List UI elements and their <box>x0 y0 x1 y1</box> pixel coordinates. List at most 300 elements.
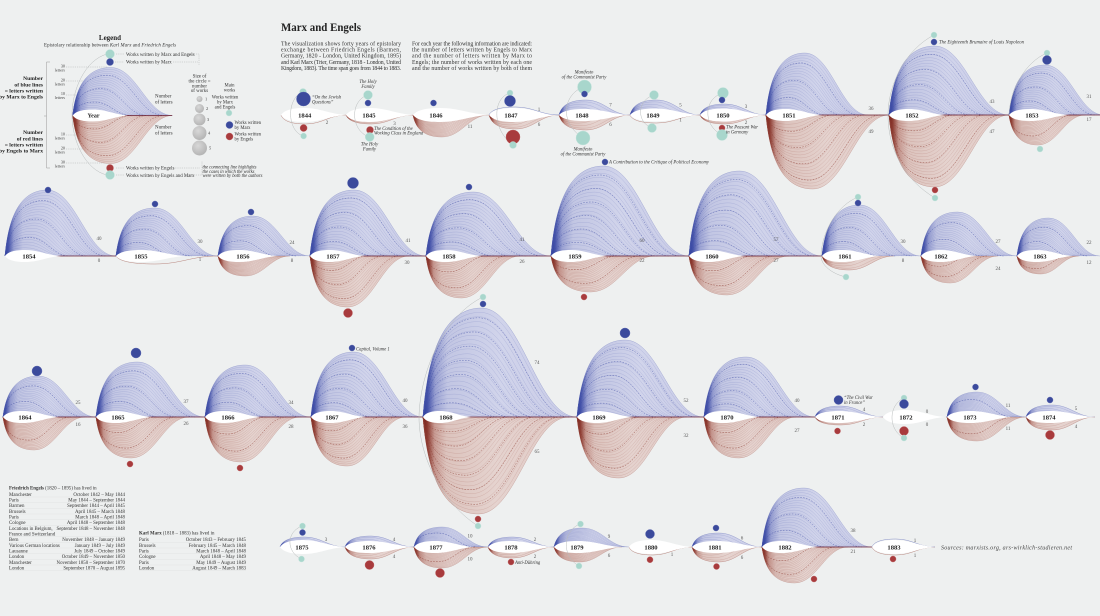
year 1850 <box>700 88 766 140</box>
legend text: blue lines: of blue lines <box>14 82 44 88</box>
year 1858: 26 <box>520 260 525 265</box>
main works key <box>212 84 262 142</box>
legend text: blue lines <box>0 76 44 100</box>
year 1855: 1855 <box>134 253 148 260</box>
year 1862: 27 <box>996 240 1001 245</box>
year 1846: 1846 <box>429 112 443 119</box>
main works key: by Marx <box>217 100 234 106</box>
year 1883: 1 <box>914 539 917 544</box>
year 1880: 1880 <box>644 544 658 551</box>
legend number-of-letters labels: of letters <box>155 132 173 136</box>
year 1848: 6 <box>609 123 612 128</box>
year 1869: 32 <box>684 434 689 439</box>
year 1872: 0 <box>926 423 929 428</box>
year 1858: 41 <box>520 238 525 243</box>
year 1867: 40 <box>402 399 408 404</box>
table: places Engels lived: September 1844 – April 1845 <box>67 504 126 509</box>
intro text: second column: and the number of letters written by Marx to <box>412 53 532 60</box>
year 1877 <box>414 527 488 578</box>
year 1879: 1879 <box>570 544 584 551</box>
year 1845: The Holy <box>359 80 378 85</box>
year 1883 <box>872 539 935 562</box>
legend text: red lines: = letters written <box>5 142 44 148</box>
legend heading: Legend <box>99 34 121 42</box>
table: places Marx lived: Paris <box>139 538 149 543</box>
legend leader lines <box>66 54 202 175</box>
size scale circles <box>192 96 207 156</box>
year 1845: The Condition of the <box>374 127 413 132</box>
legend text: red lines: Number <box>23 130 44 136</box>
legend text: blue lines: by Marx to Engels <box>0 94 44 100</box>
year 1880: 1 <box>671 553 674 558</box>
year 1877: 10 <box>468 534 473 540</box>
legend text: red lines: by Engels to Marx <box>0 148 43 154</box>
legend connecting arc <box>72 54 107 175</box>
year 1868 <box>419 294 577 529</box>
year 1845: 3 <box>393 122 396 127</box>
table: places Engels lived: May 1844 – September 1844 <box>68 498 126 504</box>
year 1857 <box>310 178 426 318</box>
table: places Engels lived: April 1845 – March 1848 <box>75 510 126 515</box>
year 1848: Manifesto <box>574 70 594 76</box>
main works key: by Engels <box>234 138 253 142</box>
table: places Marx lived: Brussels <box>139 544 156 549</box>
table: places Engels lived: September 1870 – August 1895 <box>63 566 126 572</box>
year 1867 <box>311 345 423 466</box>
year 1851: 49 <box>868 130 874 135</box>
year 1860 <box>689 171 822 295</box>
legend work circles <box>106 50 114 180</box>
year 1850: The Peasant War <box>726 126 758 130</box>
intro text: first column: and Karl Marx (Trier, Germany, 1818 - London, United <box>281 59 401 66</box>
size scale numbers: 3 <box>207 117 210 122</box>
sources: Sources: marxists.org, ars-wirklich-studieren.net <box>941 546 1072 552</box>
legend scale labels: 20 <box>61 78 65 82</box>
year 1866: 34 <box>288 401 294 406</box>
year 1865 <box>96 348 205 467</box>
year 1847: 1 <box>538 108 541 113</box>
year 1863: 22 <box>1086 241 1092 246</box>
year 1845: 1845 <box>362 112 376 119</box>
table: places Engels lived: Cologne <box>9 521 26 526</box>
table: places Engels lived: Paris <box>9 516 19 520</box>
year 1859: 1859 <box>568 253 582 260</box>
legend work labels: Works written by Engels and Marx <box>126 174 195 179</box>
table: places Engels lived: November 1848 – January 1849 <box>62 538 126 543</box>
table: places Engels lived: Brussels <box>9 510 26 515</box>
legend scale labels: letters <box>55 95 65 100</box>
year 1874: 5 <box>1075 407 1078 412</box>
year 1852: 43 <box>990 100 995 105</box>
year 1855 <box>116 201 218 264</box>
year 1849: 1849 <box>646 112 660 119</box>
table: places Marx lived: March 1848 – April 1848 <box>196 550 247 554</box>
year 1851 <box>766 53 889 189</box>
year 1881: 1881 <box>708 544 722 551</box>
year 1860: 27 <box>774 259 779 264</box>
year 1858 <box>426 184 551 298</box>
connecting line note: the cases in which the works <box>202 170 255 175</box>
table: places Engels lived: April 1848 – September 1848 <box>67 521 126 526</box>
year 1853: 17 <box>1086 118 1092 123</box>
year 1851: 36 <box>868 107 874 112</box>
legend scale labels: 20 <box>61 146 65 150</box>
year 1845 <box>346 80 424 152</box>
year 1871: 4 <box>863 408 866 413</box>
year 1852 <box>888 32 1025 201</box>
size scale numbers: 5 <box>209 146 212 150</box>
legend work labels <box>126 53 195 179</box>
table: places Marx lived: May 1849 – August 1849 <box>196 561 247 566</box>
year 1880 <box>629 530 692 563</box>
year 1848: 7 <box>609 104 612 108</box>
year 1876 <box>345 536 414 570</box>
legend scale labels: 10 <box>61 132 65 136</box>
year 1866: 28 <box>288 425 294 430</box>
legend example curves: Year <box>88 114 100 120</box>
year 1856: 8 <box>291 259 294 264</box>
size scale heading: the circle = <box>188 80 211 84</box>
year 1855: 30 <box>198 240 203 245</box>
year 1881: 6 <box>741 556 744 561</box>
year 1881: 6 <box>741 536 744 542</box>
year 1868: 65 <box>534 450 540 455</box>
table: places Engels lived <box>9 486 126 572</box>
table: places Marx lived: April 1848 – May 1849 <box>200 555 247 560</box>
year 1879: 6 <box>608 554 611 559</box>
main works key: Works written <box>234 121 262 126</box>
year 1872 <box>883 395 945 441</box>
legend scale labels <box>55 64 65 168</box>
year 1863: 12 <box>1086 261 1092 266</box>
size scale heading <box>188 74 211 94</box>
main works key: and Engels <box>215 106 236 110</box>
year 1864 <box>3 366 96 450</box>
legend number-of-letters labels <box>155 94 173 136</box>
intro text: second column: the number of letters written by Engels to Marx <box>412 47 532 54</box>
year 1854: 0 <box>98 259 101 264</box>
table: places Marx lived: Paris <box>139 550 149 554</box>
year 1870: 27 <box>794 429 800 434</box>
panel: legend <box>0 34 263 180</box>
year 1856: 1856 <box>236 253 250 260</box>
connecting line note: the connecting line highlights <box>202 166 257 170</box>
legend scale labels: letters <box>55 68 65 72</box>
year 1874: 1874 <box>1042 414 1056 421</box>
connecting line note <box>202 166 263 179</box>
year 1853 <box>1009 50 1100 152</box>
table: places Engels lived: October 1849 – November 1850 <box>62 555 126 560</box>
year 1864: 16 <box>76 423 81 428</box>
year 1853: 31 <box>1086 95 1092 100</box>
year 1874: 4 <box>1075 425 1078 430</box>
connecting line note: were written by both the authors <box>202 174 263 179</box>
year 1869 <box>577 328 704 478</box>
year 1873: 11 <box>1006 404 1011 409</box>
table: places Engels lived: March 1848 – April 1848 <box>75 516 126 520</box>
year 1883: 1 <box>914 554 917 559</box>
main works key: Works written <box>234 132 262 138</box>
year 1857: 30 <box>404 261 410 266</box>
year 1858: 1858 <box>442 253 456 260</box>
year 1873: 1873 <box>963 414 977 421</box>
intro text: first column: Germany, 1820 - London, United Kingdom, 1895) <box>281 53 401 60</box>
year 1863: 1863 <box>1033 253 1047 260</box>
year 1850: 2 <box>745 121 748 126</box>
year 1874 <box>1026 397 1095 440</box>
year 1848: of the Communist Party <box>561 152 606 158</box>
year 1850: 3 <box>745 105 748 110</box>
legend scale labels: letters <box>55 164 65 168</box>
year 1845: Family <box>360 85 376 90</box>
intro text: second column: For each year the following information are indicated: <box>412 40 532 48</box>
table: places Engels lived: Lausanne <box>9 550 28 554</box>
year 1852: The Eighteenth Brumaire of Louis Napoleon <box>939 40 1025 46</box>
year 1860: 1860 <box>705 253 719 260</box>
intro text: first column: Kingdom, 1883). The time span goes from 1844 to 1883. <box>281 65 402 72</box>
year 1864: 25 <box>76 401 81 406</box>
year 1864: 1864 <box>18 414 32 421</box>
size scale heading: Size of <box>193 74 207 80</box>
intro text: second column: Engels; the number of works written by each one <box>412 59 532 66</box>
main works key: works <box>224 88 235 94</box>
year 1879 <box>554 521 629 569</box>
size scale numbers: 1 <box>205 96 207 102</box>
table: places Engels lived: Locations in Belgium, <box>9 527 53 532</box>
legend scale labels: 30 <box>61 64 65 68</box>
year 1870: 40 <box>794 399 800 404</box>
legend work labels: Works written by Marx <box>126 60 172 66</box>
intro text: second column: and the number of works written by both of them <box>412 65 532 72</box>
title: Marx and Engels <box>281 20 361 34</box>
table: places Marx lived <box>139 532 247 572</box>
size scale heading: of works <box>191 89 208 94</box>
main works key: by Marx <box>234 126 251 131</box>
year 1869: 1869 <box>592 414 606 421</box>
size scale heading: number <box>192 84 207 90</box>
table: places Engels lived: September 1848 – November 1848 <box>57 527 126 532</box>
year 1871: in France” <box>844 401 865 406</box>
year 1871: 2 <box>863 423 866 428</box>
year 1854: 1854 <box>22 253 36 260</box>
table: places Engels lived: Bern <box>9 538 19 543</box>
table: places Engels lived: July 1849 – October 1849 <box>74 550 126 554</box>
year 1860: 57 <box>774 238 779 243</box>
table: places Marx lived: Karl Marx (1818 – 1883) has lived in <box>139 532 215 536</box>
year 1872: 1872 <box>899 414 913 421</box>
legend scale labels: 30 <box>61 160 65 164</box>
year 1876: 4 <box>393 555 396 560</box>
year 1870 <box>704 357 815 458</box>
year 1881 <box>692 525 762 570</box>
year 1875: 3 <box>325 538 328 543</box>
year 1878: Anti-Dühring <box>514 561 541 566</box>
year 1877: 1877 <box>429 544 443 551</box>
year 1845: Family <box>362 148 377 152</box>
year 1849: 1 <box>679 118 682 124</box>
size scale numbers <box>205 96 212 150</box>
year 1865: 37 <box>184 400 189 405</box>
legend subtitle: Epistolary relationship between Karl Marx and Friedrich Engels <box>44 44 176 48</box>
table: places Engels lived: Various German locations <box>9 544 60 549</box>
intro text: first column <box>281 40 402 72</box>
year 1868: 74 <box>534 361 540 366</box>
legend text: blue lines: Number <box>23 76 44 82</box>
year 1866 <box>205 365 311 471</box>
year 1876: 1876 <box>362 544 376 551</box>
year 1847: 1847 <box>504 112 518 119</box>
year 1882 <box>762 488 872 583</box>
year 1849: 5 <box>679 104 682 108</box>
legend example curves <box>73 68 173 164</box>
legend scale labels: 10 <box>61 91 65 96</box>
year 1867: 1867 <box>325 414 339 421</box>
table: places Engels lived: Friedrich Engels (1820 – 1895) has lived in <box>9 486 97 492</box>
table: places Engels lived: January 1849 – July 1849 <box>75 544 126 549</box>
legend work labels: Works written by Engels <box>126 166 174 172</box>
year 1844 <box>281 88 346 139</box>
year 1859 <box>551 159 710 300</box>
year 1850: 1850 <box>716 112 730 119</box>
table: places Marx lived: Cologne <box>139 555 156 560</box>
legend text: red lines <box>0 130 44 154</box>
year 1878 <box>488 537 554 566</box>
year 1878: 2 <box>534 538 537 543</box>
legend text: red lines: of red lines <box>17 136 44 142</box>
legend scale labels: letters <box>55 82 65 86</box>
intro text: second column <box>412 40 532 72</box>
main works key: Main <box>225 84 235 88</box>
year 1871: “The Civil War <box>844 395 873 401</box>
year 1844: 1844 <box>298 112 312 119</box>
table: places Engels lived: November 1850 – September 1870 <box>57 561 126 566</box>
year 1871: 1871 <box>831 414 845 421</box>
table: places Engels lived: Paris <box>9 498 19 504</box>
table: places Marx lived: February 1845 – March 1848 <box>189 544 247 549</box>
legend scale labels: letters <box>55 150 65 154</box>
legend number-of-letters labels: of letters <box>155 100 173 106</box>
year 1844: “On the Jewish <box>312 94 342 100</box>
year 1865: 1865 <box>111 414 125 421</box>
year 1871 <box>815 395 883 434</box>
year 1852: 47 <box>990 130 995 135</box>
year 1851: 1851 <box>782 112 796 119</box>
year 1846 <box>413 100 489 137</box>
year 1865: 26 <box>184 422 189 427</box>
year 1861: 8 <box>902 259 905 264</box>
year 1856 <box>218 209 310 276</box>
year 1859: A Contribution to the Critique of Political Economy <box>608 160 710 166</box>
year 1850: in Germany <box>726 130 749 136</box>
year 1853: 1853 <box>1025 112 1039 119</box>
table: places Engels lived: Barmen <box>9 504 25 509</box>
table: places Engels lived: October 1842 – May 1844 <box>73 493 126 498</box>
table: places Engels lived: London <box>9 555 25 560</box>
year 1861: 30 <box>900 240 906 245</box>
year 1872: 0 <box>926 410 929 415</box>
intro text: first column: exchange between Friedrich Engels (Barmen, <box>281 47 402 54</box>
year 1870: 1870 <box>720 414 734 421</box>
year 1866: 1866 <box>221 414 235 421</box>
year 1875 <box>280 523 345 562</box>
year 1882: 1882 <box>778 544 792 551</box>
year 1879: 9 <box>608 535 611 540</box>
year 1844: 2 <box>326 121 329 126</box>
table: places Marx lived: August 1849 – March 1883 <box>192 566 247 572</box>
year 1848: 1848 <box>575 112 589 119</box>
year 1882: 38 <box>850 529 856 534</box>
year 1854 <box>5 187 116 264</box>
table: places Engels lived: Manchester <box>9 561 32 566</box>
year 1861 <box>821 194 921 280</box>
year 1852: 1852 <box>905 112 919 119</box>
table: places Engels lived: Manchester <box>9 493 32 498</box>
year 1857: 41 <box>406 239 411 244</box>
table: places Engels lived: France and Switzerland <box>9 532 56 538</box>
legend number-of-letters labels: Number <box>155 94 172 100</box>
year 1875: 1875 <box>295 544 309 551</box>
legend bracket <box>44 62 50 168</box>
year 1849 <box>630 90 700 132</box>
table: places Marx lived: London <box>139 566 155 572</box>
table: places Engels lived: London <box>9 566 25 572</box>
year 1847: 6 <box>538 123 541 128</box>
year 1848 <box>559 70 630 158</box>
year 1844: Questions” <box>312 100 334 106</box>
year 1867: Capital, Volume 1 <box>356 348 390 352</box>
table: places Marx lived: Paris <box>139 561 149 566</box>
year 1847 <box>489 90 559 148</box>
year 1848: of the Communist Party <box>562 76 607 80</box>
legend scale labels: letters <box>55 136 65 140</box>
year 1862: 1862 <box>934 253 948 260</box>
year 1845: The Holy <box>361 142 379 148</box>
year 1882: 21 <box>850 550 856 555</box>
size scale numbers: 2 <box>206 106 208 111</box>
year 1846: 11 <box>468 125 473 130</box>
year 1857: 1857 <box>326 253 340 260</box>
year 1878: 1878 <box>504 544 518 551</box>
year 1859: 60 <box>640 239 645 244</box>
year 1855: 1 <box>199 258 202 263</box>
year 1883: 1883 <box>887 544 901 551</box>
year 1861: 1861 <box>838 253 852 260</box>
year 1862 <box>921 212 1017 283</box>
year 1863 <box>1017 218 1100 274</box>
table: places Marx lived: October 1843 – February 1845 <box>186 538 247 543</box>
main works key: Works written <box>212 96 239 100</box>
year 1876: 4 <box>393 538 396 543</box>
year 1867: 36 <box>402 425 408 430</box>
year 1877: 10 <box>468 558 473 562</box>
legend number-of-letters labels: Number <box>155 126 172 130</box>
intro text: first column: The visualization shows forty years of epistolary <box>281 40 401 48</box>
year 1859: 22 <box>640 259 645 264</box>
size scale numbers: 4 <box>208 130 211 136</box>
year 1873 <box>947 384 1026 441</box>
year 1848: Manifesto <box>573 148 593 152</box>
year 1856: 24 <box>290 241 295 246</box>
legend work labels: Works written by Marx and Engels <box>126 53 195 58</box>
year 1862: 24 <box>996 267 1001 272</box>
year 1845: Working Class in England <box>374 132 424 136</box>
year 1854: 40 <box>96 237 102 242</box>
year 1869: 52 <box>684 399 689 404</box>
year 1868: 1868 <box>439 414 453 421</box>
year 1873: 11 <box>1006 427 1011 432</box>
year 1878: 2 <box>534 555 537 560</box>
legend text: blue lines: = letters written <box>5 88 44 94</box>
